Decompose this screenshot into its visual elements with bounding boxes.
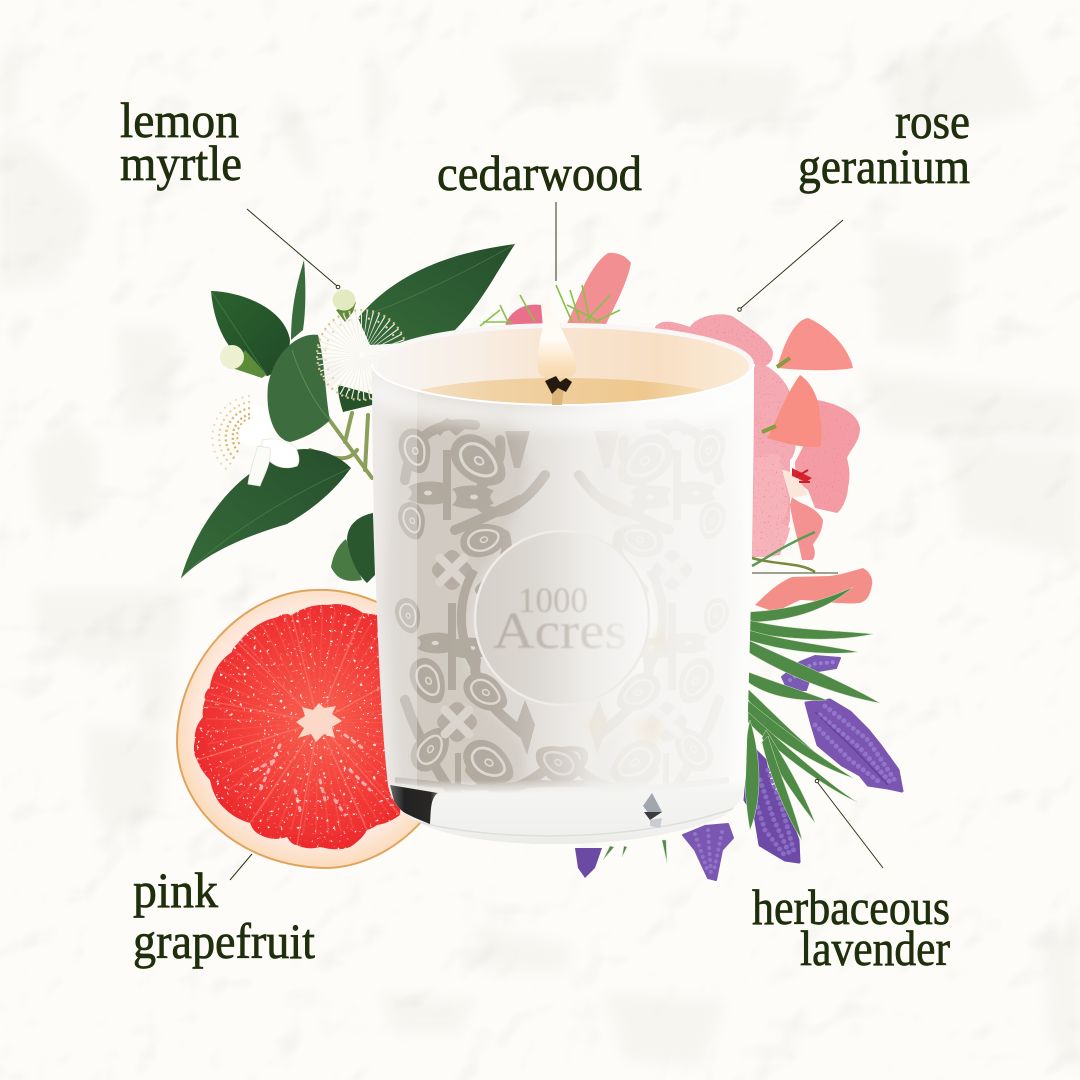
spike large right bbox=[806, 700, 902, 791]
etched pattern and glass base bbox=[372, 362, 756, 855]
jar inner wall bbox=[377, 328, 749, 404]
stem bbox=[248, 367, 372, 478]
medallion text: 1000 bbox=[518, 580, 588, 620]
petal base mass bbox=[745, 360, 796, 558]
pith centre bbox=[296, 703, 342, 742]
label: pink grapefruit: grapefruit bbox=[133, 913, 315, 969]
glass reflection dark bbox=[390, 785, 438, 824]
leader: herbaceous lavender bbox=[815, 779, 883, 868]
petal right bbox=[795, 400, 860, 513]
bud: top bbox=[332, 290, 356, 322]
petal coral bbox=[767, 375, 822, 447]
leaf: centre bbox=[267, 335, 330, 442]
petal top right bbox=[777, 318, 853, 370]
label: rose geranium bbox=[798, 93, 970, 194]
glass reflection prism bbox=[643, 793, 662, 828]
medallion bbox=[475, 531, 649, 705]
illustration: rose geranium flowers bbox=[655, 314, 872, 612]
illustration: candle jar bbox=[372, 290, 756, 855]
leaves: small lower pair bbox=[331, 513, 375, 583]
medallion text: Acres bbox=[493, 603, 627, 660]
label: lemon myrtle: lemon bbox=[120, 92, 239, 148]
geranium centre bbox=[762, 358, 812, 498]
cream blotches bbox=[585, 632, 668, 742]
leader: cedarwood bbox=[555, 202, 557, 281]
rim highlight bbox=[372, 364, 754, 405]
labels bbox=[120, 92, 970, 976]
rim glow bbox=[372, 378, 754, 419]
clear glass base bbox=[388, 782, 742, 844]
spike bottom bbox=[683, 824, 733, 880]
label: cedarwood: cedarwood bbox=[437, 145, 642, 201]
fine pulp bbox=[256, 660, 380, 784]
flame bbox=[538, 290, 576, 380]
spike upper bbox=[782, 656, 840, 690]
label: rose geranium: rose bbox=[895, 93, 970, 149]
flower: top stamens bbox=[317, 310, 407, 400]
jar body bbox=[372, 364, 754, 844]
illustration: lemon myrtle sprig bbox=[181, 244, 515, 583]
wick bbox=[545, 376, 572, 405]
flesh bbox=[194, 604, 405, 849]
leader: lemon myrtle bbox=[247, 209, 340, 289]
flower: lower white petals bbox=[248, 439, 299, 486]
label: herbaceous lavender bbox=[752, 879, 950, 976]
illustration: cedar sprig behind flame bbox=[480, 253, 631, 328]
medallion text bbox=[493, 588, 624, 649]
leader: rose geranium bbox=[738, 220, 843, 311]
label: herbaceous lavender: herbaceous bbox=[752, 879, 950, 935]
leaf: upper left bbox=[211, 291, 290, 376]
stem lines by lower flower bbox=[752, 532, 838, 573]
wax surface bbox=[392, 378, 732, 432]
spike lower centre bbox=[745, 745, 799, 862]
illustration: pink grapefruit slice bbox=[177, 590, 420, 868]
leaf: upper right bbox=[358, 244, 515, 345]
green needles bbox=[480, 285, 620, 326]
bud: left bbox=[220, 345, 266, 378]
etched pattern bbox=[385, 415, 739, 793]
leader lines bbox=[230, 202, 883, 880]
lower flower bbox=[755, 568, 872, 612]
leader: pink grapefruit bbox=[230, 854, 252, 880]
label: pink grapefruit: pink bbox=[133, 862, 218, 918]
left reflection stripe bbox=[372, 362, 417, 794]
petal mass top left bbox=[655, 314, 773, 366]
petal lower bbox=[790, 497, 823, 560]
leaf: lower large bbox=[181, 449, 351, 578]
rind bbox=[177, 590, 420, 868]
jar rim bbox=[372, 323, 754, 405]
leaf: behind flower bbox=[338, 385, 375, 412]
leaf: narrow bbox=[291, 260, 305, 340]
petal lower left bbox=[752, 454, 790, 557]
highlights bbox=[255, 735, 370, 815]
spike far left bbox=[575, 848, 602, 878]
label: pink grapefruit bbox=[133, 862, 315, 969]
label: rose geranium: geranium bbox=[798, 138, 970, 194]
flower: lower white stamens bbox=[212, 396, 272, 472]
segment membranes bbox=[197, 613, 400, 845]
illustration: lavender spikes bbox=[575, 656, 902, 880]
label: lemon myrtle bbox=[120, 92, 242, 191]
label: lemon myrtle: myrtle bbox=[120, 135, 242, 191]
label: herbaceous lavender: lavender bbox=[800, 920, 950, 976]
illustration: rosemary needles bbox=[603, 587, 880, 863]
